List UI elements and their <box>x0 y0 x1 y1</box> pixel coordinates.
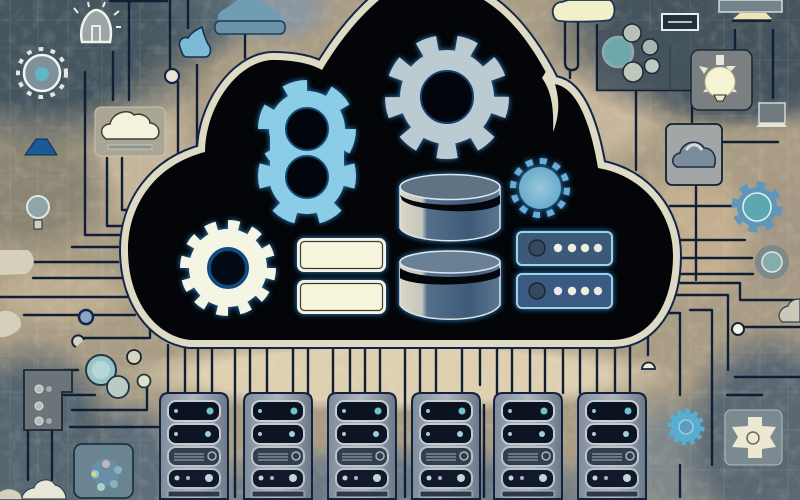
gear: grey <box>393 43 501 151</box>
icon: bulb top left <box>74 2 121 42</box>
icon: cloud with base top <box>215 0 285 34</box>
icon: half circle <box>642 363 655 369</box>
icon: node circle <box>165 69 179 83</box>
icon: small device <box>662 14 698 30</box>
icon: cloud top right <box>553 0 614 22</box>
icon: blue trapezoid <box>25 139 57 155</box>
icon: sun circle <box>18 49 66 97</box>
icon: bubble cluster left <box>86 350 150 398</box>
panel: sensor card <box>24 370 72 430</box>
icon: round knob right <box>755 245 789 279</box>
icon: laptop <box>756 103 787 127</box>
server panel lower <box>517 274 612 308</box>
icon: monitor <box>719 0 782 21</box>
icon: node circle right <box>732 323 744 335</box>
gear: blue right <box>735 185 779 229</box>
panel: star card <box>725 410 782 465</box>
gear: cyan double <box>264 86 350 219</box>
panel: cloud card right <box>666 124 722 185</box>
panel: light bulb card <box>691 50 752 110</box>
bus lines from cloud to racks <box>168 345 630 497</box>
cloud panel <box>128 0 673 340</box>
database cylinder top <box>400 174 500 241</box>
cloud shape <box>128 0 673 340</box>
server racks <box>160 393 646 499</box>
icon: cream clouds left <box>0 250 34 499</box>
server panel upper <box>517 232 612 265</box>
icon: half ring <box>72 335 84 347</box>
icon: cream cloud bottom <box>22 480 66 499</box>
gear: small blue <box>513 161 567 215</box>
icon: node ring <box>79 310 93 324</box>
icon: cloud edge right <box>779 299 800 322</box>
storage bars <box>298 239 385 313</box>
panel: cloud card <box>95 107 165 156</box>
gear: cyan small right <box>670 411 702 443</box>
panel: network card <box>74 444 133 498</box>
icon: blue cloud <box>179 27 210 57</box>
icon: small bulb <box>27 196 49 229</box>
panel: bubbles <box>598 24 690 90</box>
database cylinder bottom <box>400 251 500 319</box>
gear: cream <box>185 225 271 311</box>
